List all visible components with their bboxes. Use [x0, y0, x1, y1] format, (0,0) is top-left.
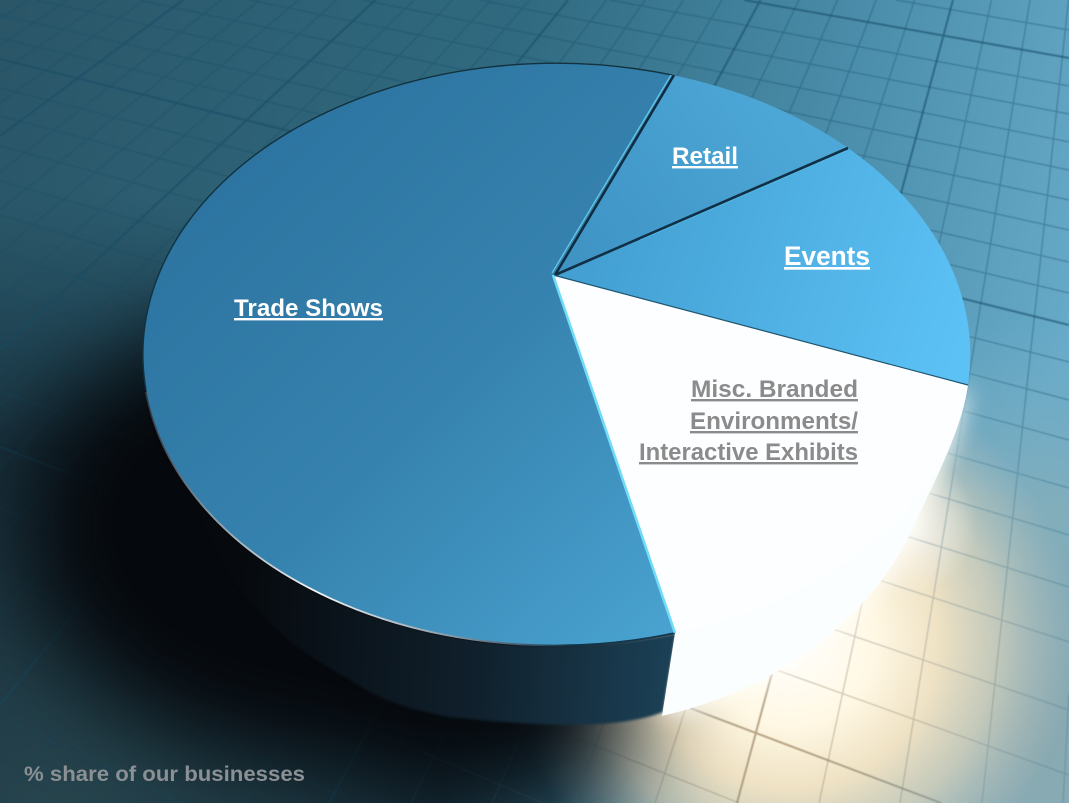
- slice divider: Trade Shows / Misc: [553, 275, 675, 633]
- label: Events: Events: [784, 241, 870, 271]
- pie side wall: dark: [146, 400, 676, 725]
- slice divider: Events / Misc: [553, 275, 968, 385]
- caption: % share of our businesses: [24, 763, 305, 786]
- slice: Trade Shows: [143, 63, 675, 645]
- slice divider: Retail / Events: [555, 148, 848, 275]
- label: Misc. Branded Environments / Interactive Exhibits: [639, 376, 858, 466]
- label: Misc. Branded Environments / Interactive Exhibits: Misc. Branded: [691, 376, 858, 403]
- pie chart: [143, 63, 970, 725]
- label: Misc. Branded Environments / Interactive Exhibits: Environments/: [690, 408, 858, 435]
- label: Trade Shows: Trade Shows: [234, 295, 383, 322]
- pie rim: lower edge: [146, 392, 675, 645]
- pie side wall: glowing white slice: [662, 385, 968, 716]
- slice: Retail: [553, 75, 848, 275]
- label: Misc. Branded Environments / Interactive Exhibits: Interactive Exhibits: [639, 439, 858, 466]
- pie rim: upper edge: [143, 63, 672, 390]
- slice: Events: [553, 148, 970, 385]
- slice: Misc. Branded Environments / Interactive Exhibits: [553, 275, 968, 633]
- slice divider: Trade Shows / Retail: [552, 75, 674, 275]
- label: Retail: Retail: [672, 143, 738, 170]
